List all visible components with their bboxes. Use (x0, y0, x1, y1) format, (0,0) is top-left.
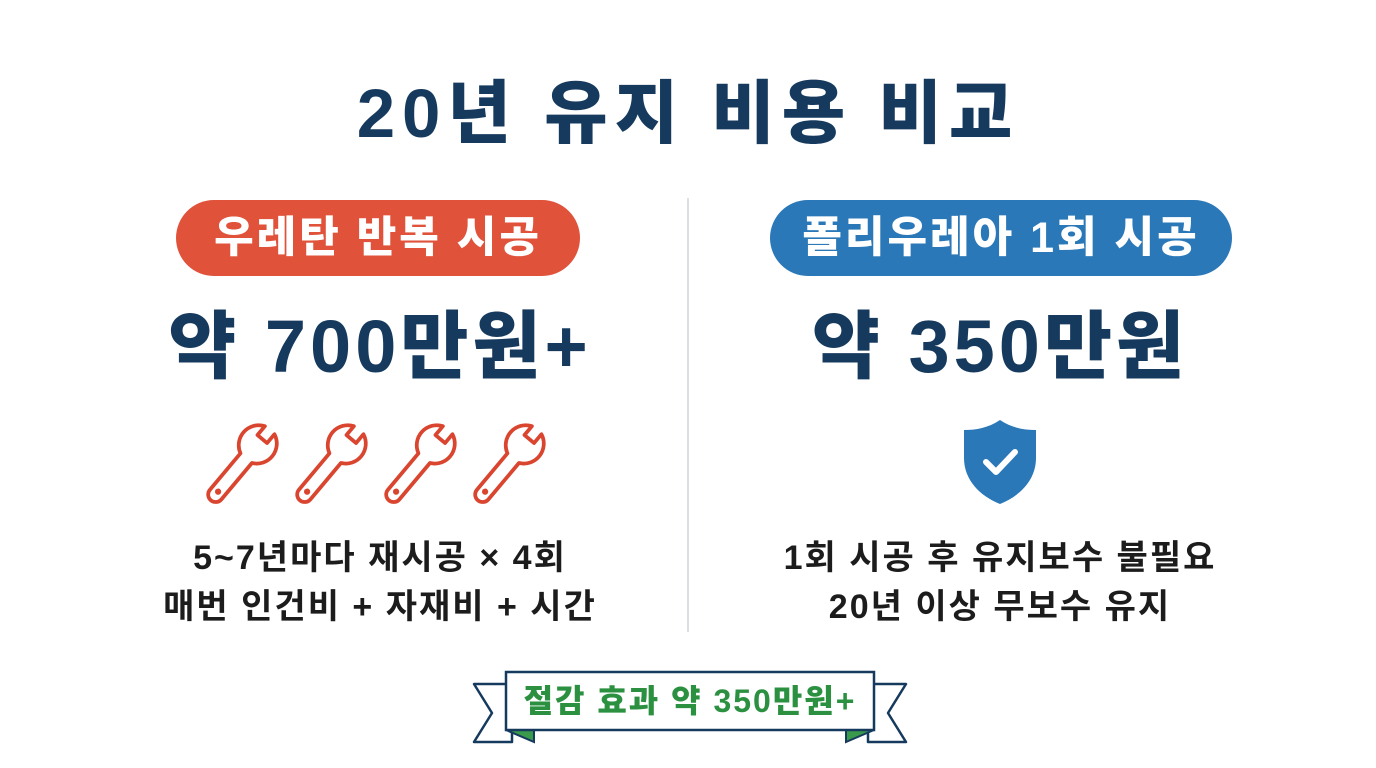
pill: urethane: 우레탄 반복 시공 (214, 214, 542, 262)
divider (687, 198, 689, 632)
ribbon text: 절감 효과 약 350만원+ (524, 683, 856, 719)
pill: urethane (176, 200, 580, 276)
amount right: 약 350만원 (812, 305, 1188, 388)
icons: wrenches (206, 423, 546, 504)
pill: polyurea: 폴리우레아 1회 시공 (802, 214, 1200, 262)
panel: left urethane (163, 200, 597, 626)
text right: 20년 이상 무보수 유지 (829, 588, 1171, 626)
amount left: 약 700만원+ (168, 305, 592, 388)
text left (163, 539, 597, 626)
text left: 매번 인건비 + 자재비 + 시간 (163, 588, 597, 626)
pill: polyurea (770, 200, 1232, 276)
text left: 5~7년마다 재시공 × 4회 (193, 539, 567, 577)
text right: 1회 시공 후 유지보수 불필요 (784, 539, 1216, 577)
text right (784, 539, 1216, 626)
panel: right polyurea (770, 200, 1232, 626)
ribbon banner (472, 670, 908, 744)
title: 20년 유지 비용 비교 (357, 75, 1019, 152)
icon: shield (964, 420, 1036, 504)
